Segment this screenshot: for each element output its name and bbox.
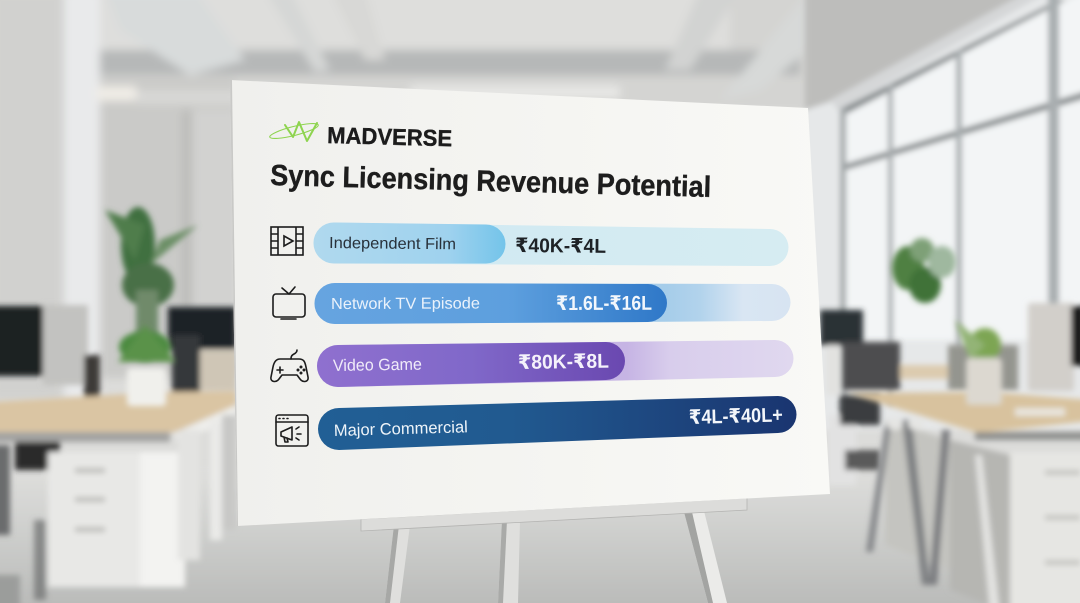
potted plant right — [955, 320, 1002, 405]
background plant left — [105, 207, 198, 340]
bar value: ₹80K-₹8L — [518, 351, 609, 374]
logo mark — [269, 121, 319, 141]
right background: plant, monitors, chair — [820, 238, 1080, 485]
bar label: Video Game — [333, 356, 422, 375]
row: video game — [271, 340, 794, 387]
easel — [361, 498, 747, 603]
icon: game controller — [271, 350, 308, 381]
easel crossbar — [361, 498, 747, 531]
right desk and drawers — [847, 392, 1080, 603]
floor — [0, 470, 1080, 603]
bar label: Independent Film — [329, 235, 456, 253]
bar track — [318, 396, 796, 450]
bar fill — [314, 222, 506, 264]
window wall — [805, 0, 1080, 430]
logo wordmark: MADVERSE — [327, 122, 453, 151]
bar value: ₹1.6L-₹16L — [556, 293, 652, 315]
bar label: Major Commercial — [334, 418, 468, 440]
potted plant left — [118, 325, 176, 406]
bar value: ₹40K-₹4L — [515, 235, 606, 258]
bar label: Network TV Episode — [331, 295, 480, 313]
row: major commercial — [276, 396, 796, 450]
bar track — [314, 283, 791, 324]
bar fill — [317, 342, 625, 387]
bar fill — [314, 283, 667, 324]
icon: television — [273, 287, 305, 319]
title: Sync Licensing Revenue Potential — [270, 159, 712, 204]
whiteboard sign — [230, 80, 830, 526]
row: independent film — [271, 222, 789, 266]
icon: film strip — [271, 227, 303, 255]
board panel — [230, 80, 830, 526]
row: network tv episode — [273, 283, 791, 324]
icon: browser megaphone — [276, 415, 308, 446]
bar value: ₹4L-₹40L+ — [689, 404, 783, 429]
bar track — [317, 340, 794, 387]
logo — [269, 121, 453, 151]
easel legs — [385, 511, 727, 603]
monitors and left desk — [0, 305, 236, 603]
bar track — [314, 222, 789, 266]
